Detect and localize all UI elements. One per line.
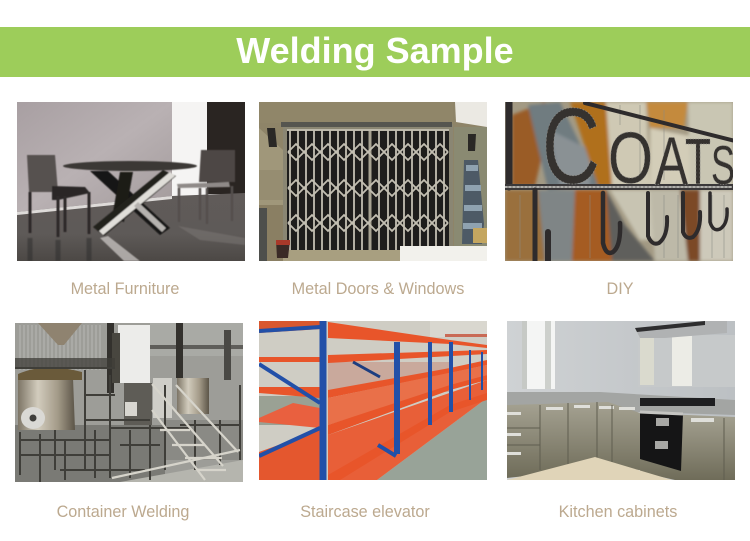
sign letters: A — [655, 123, 688, 199]
photo: staircase elevator shelving — [259, 321, 487, 480]
sign letters: S — [711, 134, 735, 196]
pipework — [15, 368, 240, 482]
lamps — [267, 128, 277, 147]
photo: metal doors and windows — [259, 102, 487, 261]
chair right — [199, 150, 235, 182]
photo: container welding — [15, 323, 243, 482]
photo: DIY rebar sign — [505, 102, 733, 261]
sign letters — [546, 108, 733, 185]
caption: Metal Doors & Windows: Metal Doors & Windows — [292, 280, 464, 298]
caption: Container Welding: Container Welding — [57, 503, 189, 521]
sign letters: O — [608, 119, 653, 199]
floor reflections — [100, 236, 140, 261]
table top — [63, 161, 197, 171]
ladder, bucket and crate — [462, 160, 484, 244]
platform tower — [118, 325, 150, 383]
back tanks — [153, 378, 172, 418]
caption: Metal Furniture: Metal Furniture — [71, 280, 179, 298]
stairs — [112, 384, 240, 480]
grille — [283, 124, 453, 259]
sign letters: C — [542, 85, 600, 206]
main tank — [18, 380, 75, 430]
table legs — [90, 171, 170, 235]
title banner — [0, 27, 750, 77]
caption: DIY: DIY — [606, 280, 634, 298]
photo: metal furniture — [17, 102, 245, 261]
chair left — [27, 155, 58, 192]
caption: Staircase elevator: Staircase elevator — [300, 503, 430, 521]
caption: Kitchen cabinets: Kitchen cabinets — [559, 503, 677, 521]
title banner: Welding Sample — [236, 30, 514, 71]
sign letters: T — [685, 125, 711, 198]
photo: kitchen cabinets — [507, 321, 735, 480]
